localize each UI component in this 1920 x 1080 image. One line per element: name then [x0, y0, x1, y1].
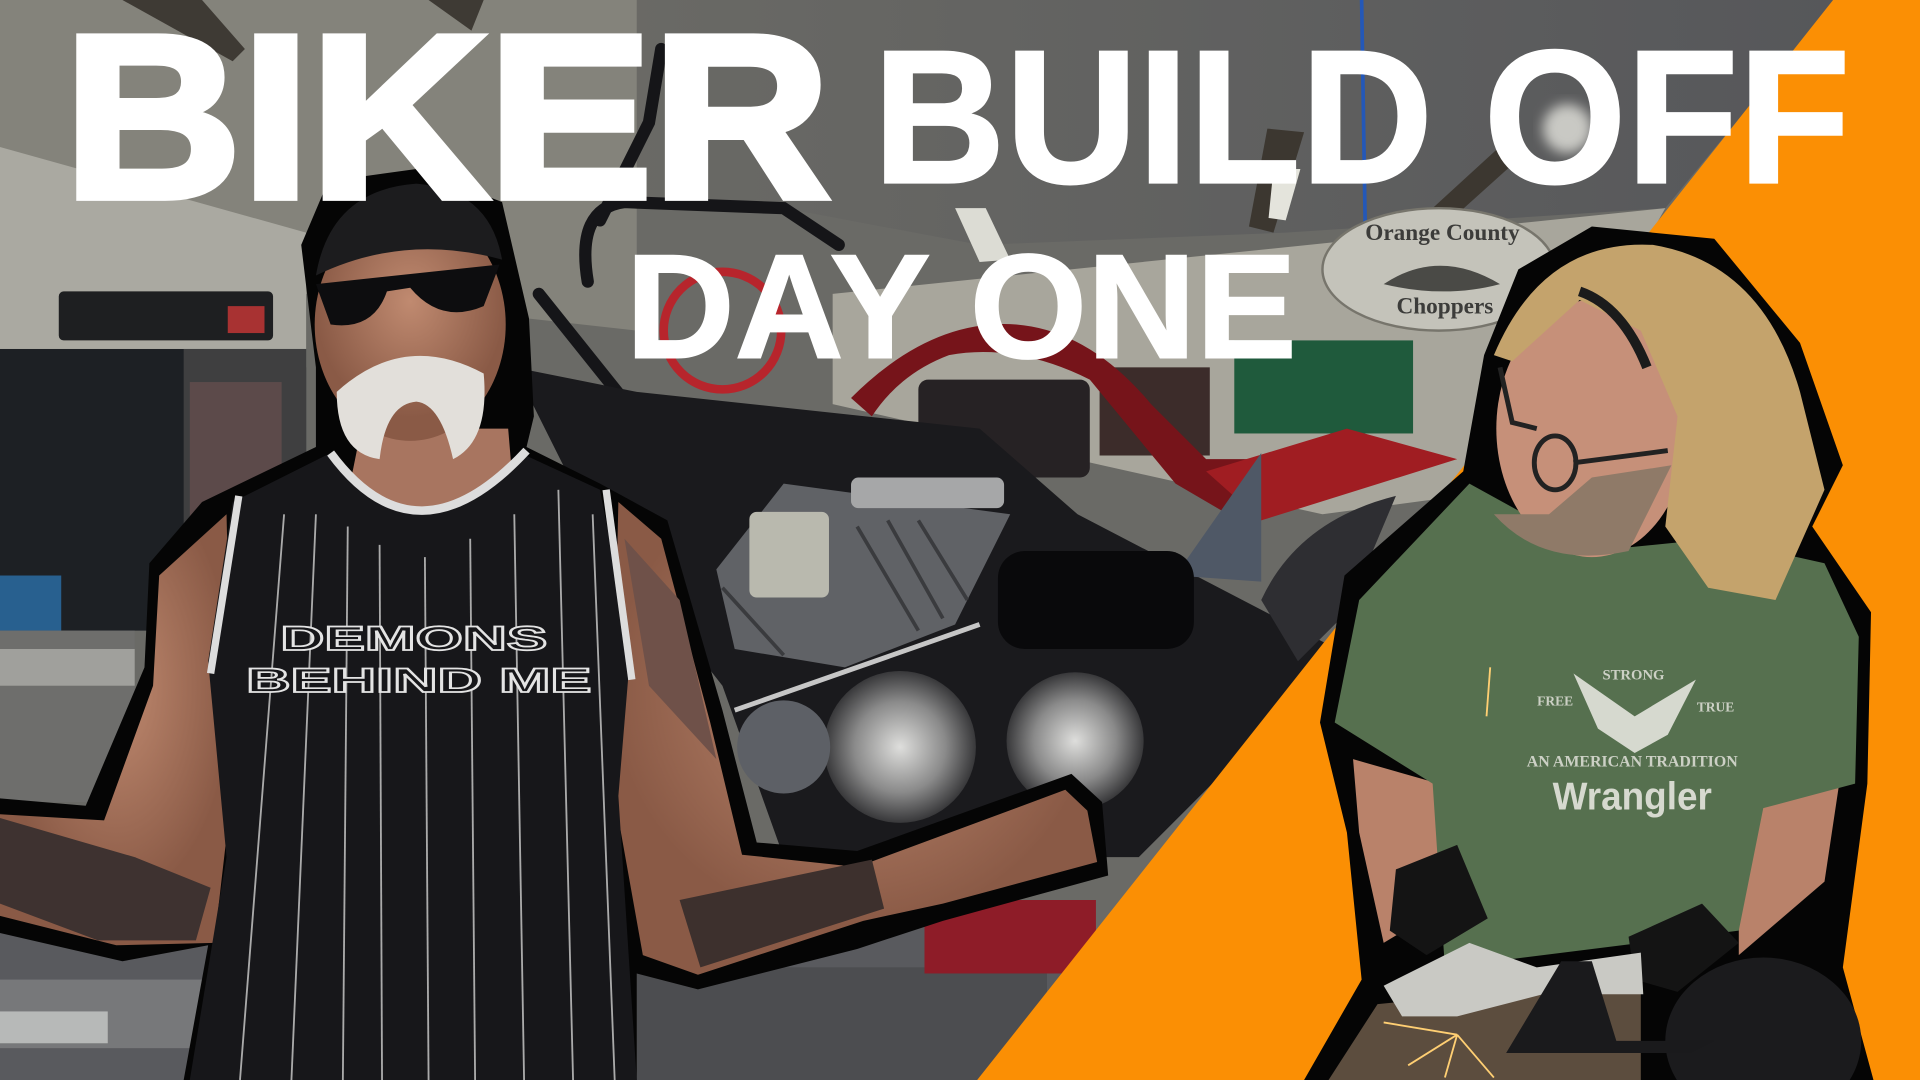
- shop sign: Orange County: [1365, 220, 1520, 246]
- motorcycle: [514, 49, 1457, 973]
- orange diagonal panel: [977, 0, 1920, 1080]
- title: BUILD OFF: [873, 11, 1850, 223]
- neck and head: [349, 429, 514, 539]
- cut-out outline: [0, 169, 1108, 1080]
- left person: bearded biker: BEHIND ME: [246, 662, 591, 700]
- glasses: [1500, 367, 1668, 490]
- cut-out outline: [1304, 227, 1873, 1080]
- bike body: [514, 367, 1325, 857]
- engine block top: [918, 380, 1090, 478]
- t-shirt graphic: FREE: [1537, 693, 1573, 708]
- grinder sparks: [1384, 667, 1494, 1078]
- jersey pinstripes: [240, 490, 615, 1080]
- workbench glow: [1329, 980, 1641, 1080]
- title: [64, 0, 1850, 390]
- title: DAY ONE: [626, 225, 1297, 390]
- head: [1496, 300, 1687, 557]
- t-shirt graphic: Wrangler: [1553, 775, 1712, 818]
- angle grinder: [1384, 943, 1643, 1016]
- bandana: [316, 184, 502, 276]
- green t-shirt: [1335, 484, 1859, 967]
- right person: man with long blond hair: [1304, 227, 1873, 1080]
- wheel: [1665, 958, 1861, 1080]
- arms: [0, 514, 233, 945]
- handlebars and forks: [539, 49, 839, 416]
- left person: bearded biker: [0, 169, 1108, 1080]
- red frame: [851, 324, 1457, 527]
- white beard: [337, 356, 485, 459]
- t-shirt graphic: STRONG: [1602, 668, 1665, 684]
- t-shirt graphic: AN AMERICAN TRADITION: [1527, 754, 1738, 771]
- welding gloves: [1390, 845, 1488, 955]
- shop sign: [1322, 208, 1555, 331]
- arms: [1353, 759, 1445, 943]
- t-shirt graphic: TRUE: [1697, 699, 1734, 714]
- shop sign: Choppers: [1396, 293, 1493, 319]
- jersey: [190, 453, 637, 1080]
- long blond hair: [1494, 245, 1824, 600]
- jersey text: DEMONS: [280, 620, 547, 658]
- t-shirt graphic: [1527, 668, 1738, 818]
- sunglasses: [316, 264, 500, 325]
